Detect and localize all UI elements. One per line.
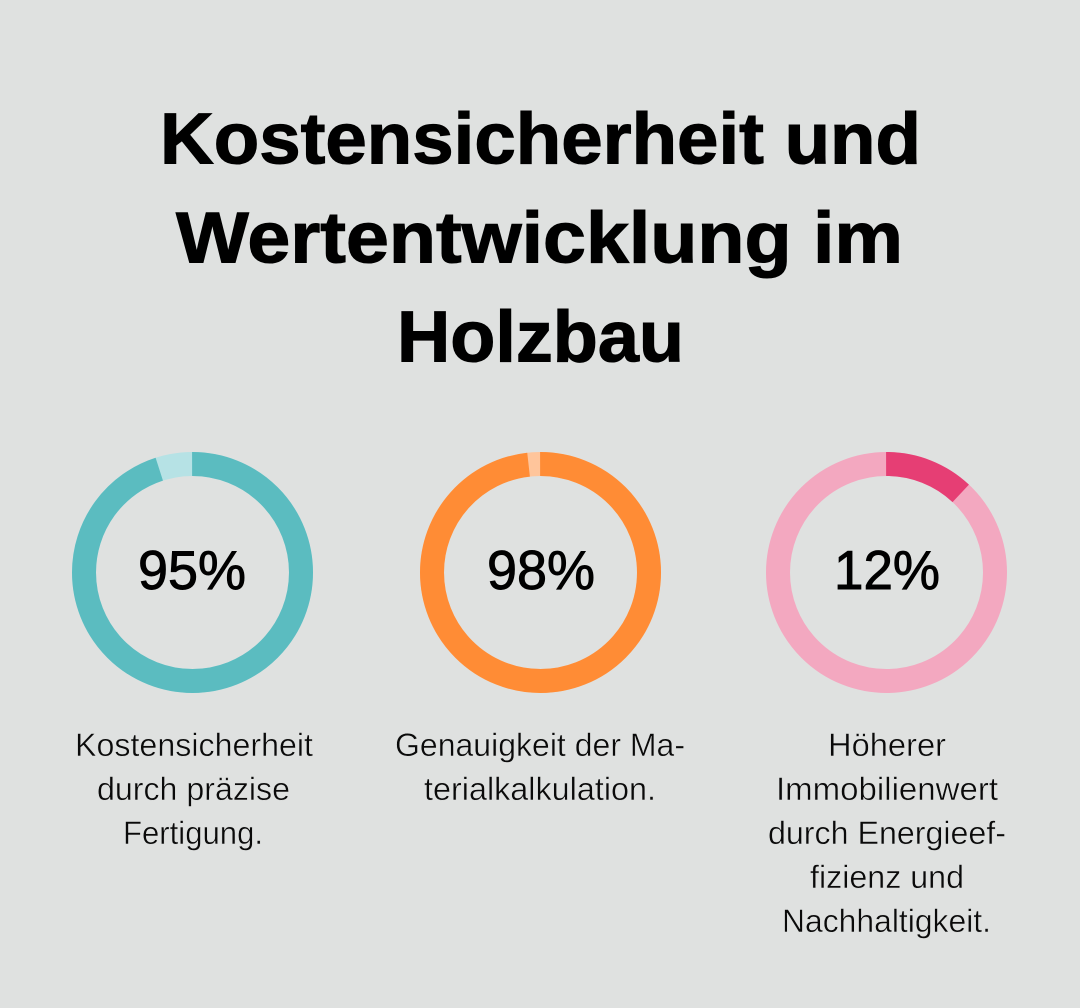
label: property value: Immobilienwert <box>776 771 998 807</box>
value: 95%: 95% <box>138 539 246 601</box>
label: cost certainty <box>75 727 313 851</box>
label: cost certainty: Fertigung. <box>123 815 263 851</box>
value: 12%: 12% <box>834 539 940 601</box>
label: material accuracy: Genauigkeit der Ma- <box>395 727 685 763</box>
panel: property value 12% <box>768 464 1006 939</box>
label: property value <box>768 727 1006 939</box>
donut chart: 95% <box>84 464 301 681</box>
donut chart: 12% <box>778 464 995 681</box>
title: Kostensicherheit und <box>160 100 921 180</box>
label: material accuracy <box>395 727 685 807</box>
donut chart: 98% <box>432 464 649 681</box>
title <box>160 100 921 378</box>
title: Wertentwicklung im <box>176 198 903 278</box>
value: 98%: 98% <box>487 539 595 601</box>
panel: material accuracy 98% <box>395 464 685 807</box>
panel: cost certainty 95% <box>75 464 313 851</box>
label: cost certainty: durch präzise <box>97 771 290 807</box>
label: property value: Höherer <box>828 727 946 763</box>
label: material accuracy: terialkalkulation. <box>424 771 656 807</box>
label: cost certainty: Kostensicherheit <box>75 727 313 763</box>
label: property value: durch Energieef- <box>768 815 1006 851</box>
label: property value: fizienz und <box>810 859 964 895</box>
title: Holzbau <box>397 298 684 378</box>
label: property value: Nachhaltigkeit. <box>782 903 991 939</box>
